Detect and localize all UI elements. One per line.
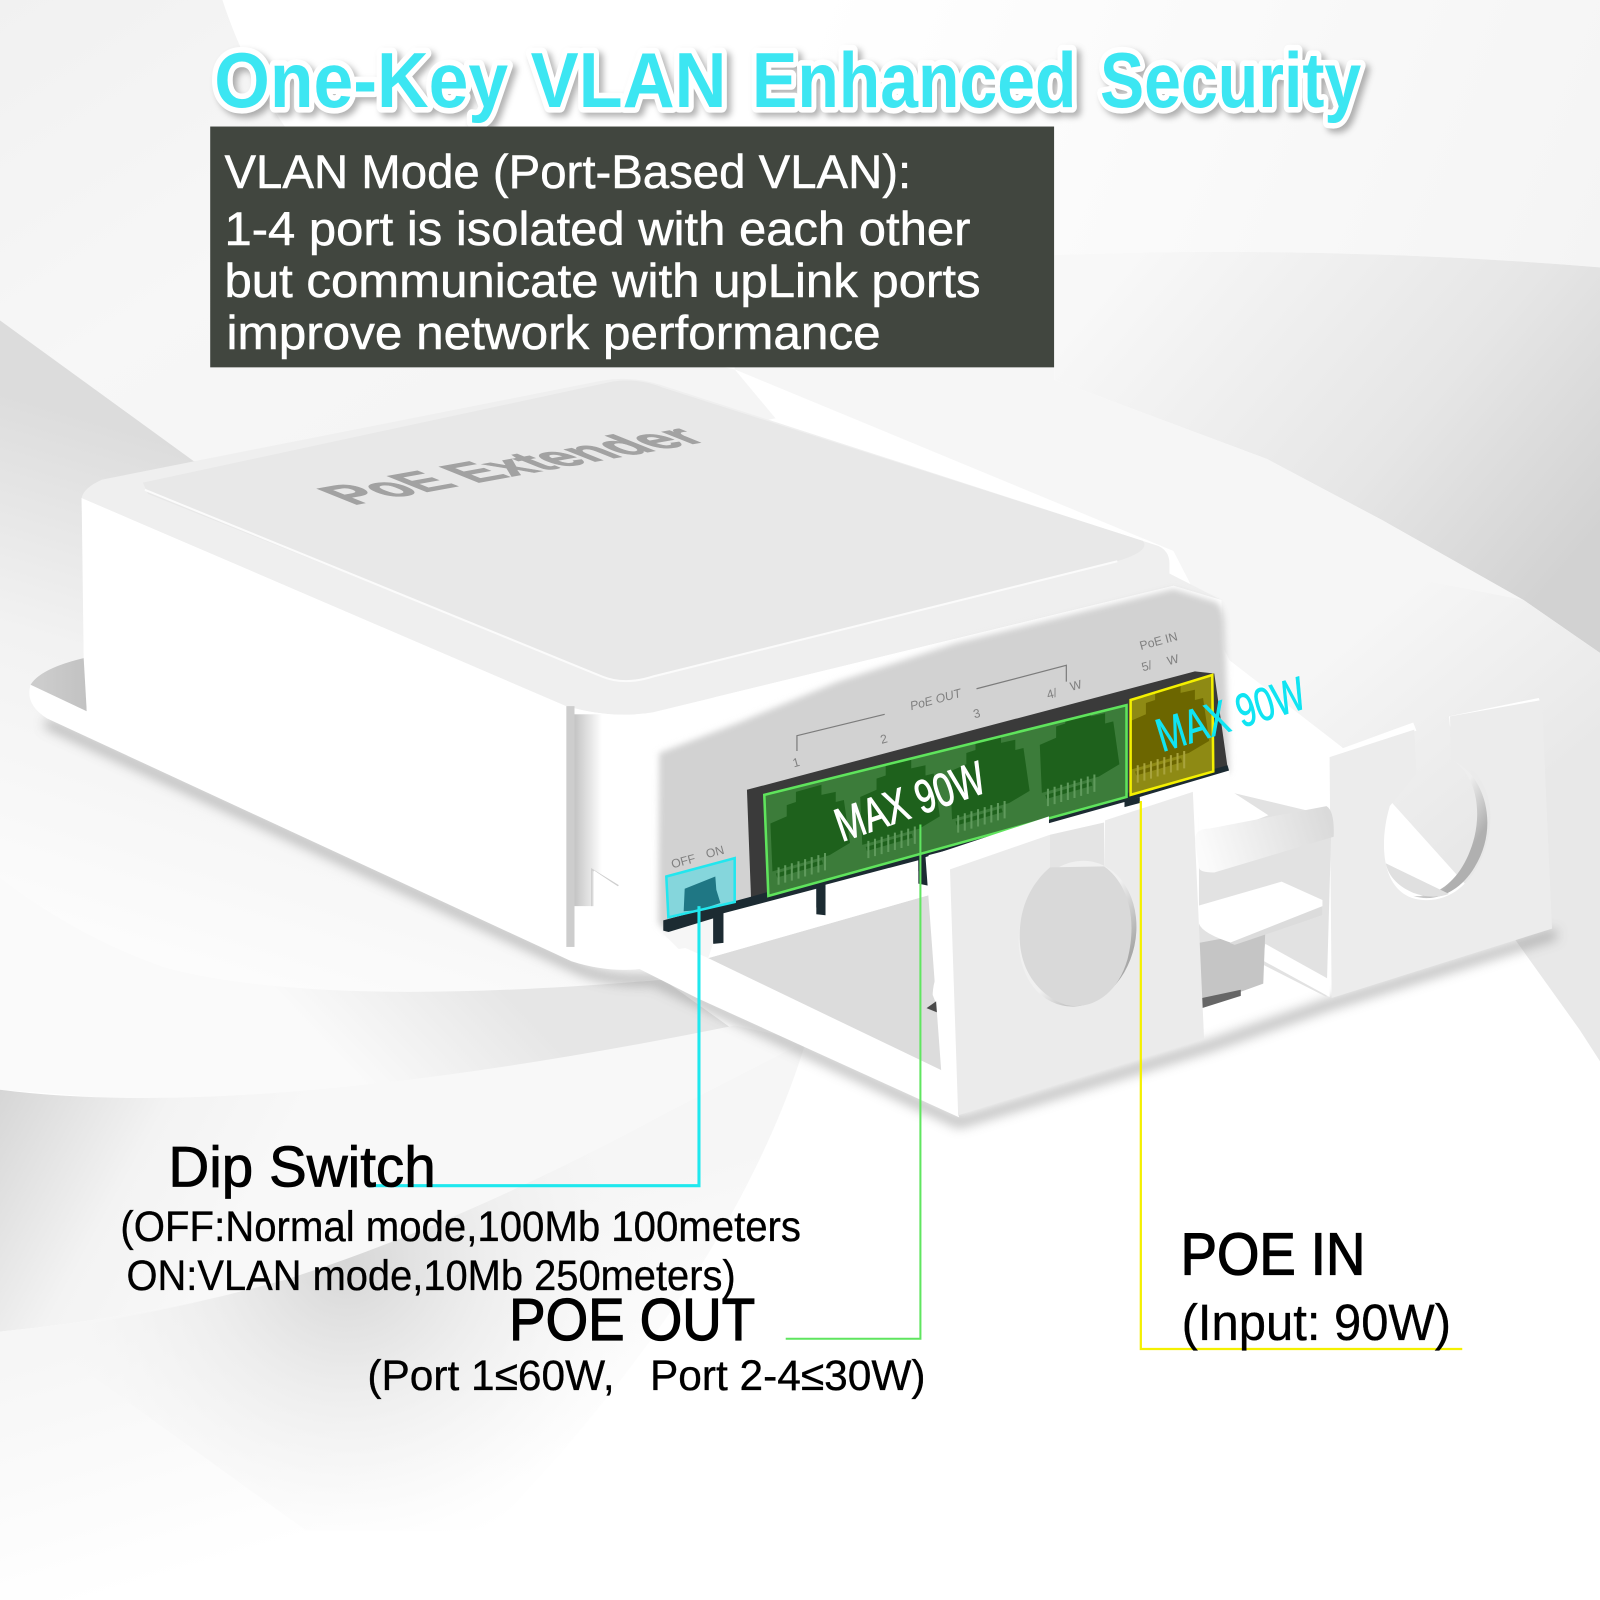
MAX 90W label on POE OUT: MAX 90W	[828, 751, 992, 851]
panel: VLAN mode description: VLAN Mode (Port-Based VLAN):	[224, 146, 911, 198]
callout: Dip Switch: ON:VLAN mode,10Mb 250meters)	[127, 1252, 736, 1300]
panel: VLAN mode description: but communicate with upLink ports	[224, 255, 981, 307]
silk-screen labels	[670, 629, 1181, 871]
silk-screen labels: OFF	[670, 851, 697, 871]
callout: POE OUT: POE OUT	[509, 1286, 755, 1353]
device: PoE extender with open cable cage	[29, 379, 1552, 1117]
callout: POE OUT	[367, 1286, 926, 1400]
flange and left side of body	[29, 498, 673, 970]
title: Security	[1100, 38, 1361, 124]
port recess	[747, 671, 1228, 898]
callout: Dip Switch: (OFF:Normal mode,100Mb 100meters	[120, 1203, 801, 1251]
title: VLAN	[531, 38, 727, 124]
cage lip with notches	[663, 770, 1230, 958]
leader line: dip switch	[367, 906, 699, 1186]
connector block and bars	[1195, 787, 1334, 1008]
silk-screen labels: PoE IN	[1138, 629, 1179, 653]
silk-screen labels: 2	[879, 731, 889, 747]
callout: POE OUT: (Port 1≤60W, Port 2-4≤30W)	[367, 1352, 926, 1400]
front panel	[566, 586, 1230, 949]
highlight: POE IN port	[1130, 675, 1213, 795]
top cover of body	[82, 379, 1221, 715]
cage floor and wall	[582, 891, 959, 1117]
label: PoE Extender: PoE Extender	[301, 420, 723, 510]
silk-screen labels: 3	[972, 706, 982, 721]
callout: Dip Switch: Dip Switch	[168, 1136, 436, 1200]
silk-screen labels: 5/	[1140, 658, 1154, 674]
callout: POE IN: (Input: 90W)	[1182, 1294, 1451, 1351]
silk-screen labels: W	[1069, 677, 1084, 694]
callout: Dip Switch	[120, 1136, 801, 1300]
front plate with keyhole	[926, 790, 1204, 1115]
panel: VLAN mode description: improve network performance	[227, 307, 881, 359]
callout: POE IN: POE IN	[1181, 1220, 1365, 1287]
leader line: POE IN	[1141, 801, 1462, 1349]
silk-screen labels: ON	[704, 843, 726, 861]
bottom dark strip	[663, 765, 1230, 944]
silk-screen labels: 1	[791, 755, 801, 770]
panel: VLAN mode description	[210, 127, 1054, 367]
title	[214, 38, 1361, 124]
panel: VLAN mode description: 1-4 port is isolated with each other	[224, 203, 970, 255]
title: One-Key	[214, 38, 508, 124]
callout: POE IN	[1181, 1220, 1451, 1351]
MAX 90W label on POE IN: MAX 90W	[1150, 667, 1312, 762]
silk-screen labels: 4/	[1045, 686, 1059, 702]
silk-screen labels: PoE OUT	[908, 686, 964, 713]
highlight: dip switch	[666, 858, 735, 917]
device soft shadow	[46, 722, 1556, 1122]
title: Enhanced	[752, 38, 1077, 124]
highlight: POE OUT ports	[764, 705, 1127, 896]
silk-screen labels: W	[1166, 652, 1181, 668]
back plate with keyhole	[1318, 698, 1552, 998]
leader line: POE OUT	[786, 824, 920, 1339]
